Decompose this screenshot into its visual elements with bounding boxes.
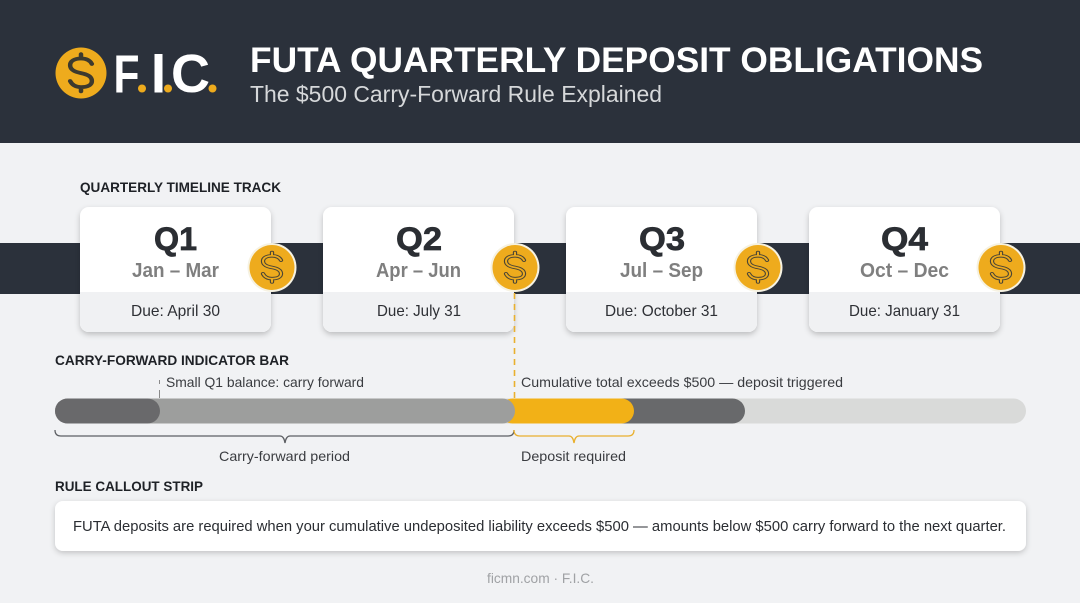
logo: F.I.C. [56, 44, 216, 104]
carry-forward indicator bar [55, 398, 1026, 424]
timeline band [0, 243, 1080, 294]
annotation: small Q1 balance: Small Q1 balance: carry forward [166, 374, 364, 390]
card: Q3: Jul – Sep [620, 260, 703, 282]
bracket: carry-forward period [55, 430, 514, 464]
icon: coin Q4 [976, 243, 1026, 292]
icon: coin Q3 [734, 243, 782, 292]
bracket: carry-forward period: Carry-forward period [219, 448, 350, 464]
icon: coin Q2 [490, 243, 540, 292]
card: Q3 [566, 207, 757, 332]
card: Q2 [323, 207, 514, 332]
card: Q1: Q1 [154, 221, 197, 257]
logo: F.I.C.: F [114, 44, 140, 104]
card: Q3: Due: October 31 [605, 303, 718, 320]
dashed deposit trigger line [514, 293, 516, 398]
card: Q1 [80, 207, 271, 332]
card: Q3: Q3 [639, 221, 685, 257]
logo: F.I.C.: C [171, 44, 210, 104]
card: Q2: Due: July 31 [377, 303, 461, 320]
card: Q4: Due: January 31 [849, 303, 960, 320]
rule callout [55, 501, 1026, 551]
subtitle: The $500 Carry-Forward Rule Explained [250, 81, 662, 107]
card: Q2: Apr – Jun [376, 260, 461, 282]
header banner [0, 0, 1080, 143]
heading: carry-forward indicator bar: CARRY-FORWARD INDICATOR BAR [55, 352, 289, 368]
card: Q1: Due: April 30 [131, 303, 220, 320]
heading: quarterly timeline track: QUARTERLY TIMELINE TRACK [80, 179, 281, 195]
bracket: deposit required [514, 430, 634, 464]
card: Q4: Oct – Dec [860, 260, 949, 282]
title: FUTA QUARTERLY DEPOSIT OBLIGATIONS [250, 41, 983, 80]
card: Q4 [809, 207, 1000, 332]
card: Q4: Q4 [881, 221, 928, 257]
heading: rule callout strip: RULE CALLOUT STRIP [55, 478, 203, 494]
card: Q1: Jan – Mar [132, 260, 219, 282]
footer: ficmn.com · F.I.C. [487, 570, 594, 586]
bracket: deposit required: Deposit required [521, 448, 626, 464]
card: Q2: Q2 [396, 221, 442, 257]
icon: coin Q1 [248, 243, 296, 292]
rule callout: FUTA deposits are required when your cumulative undeposited liability exceeds $500 — amounts below $500 carry forward to the next quarter. [73, 518, 1006, 535]
annotation: cumulative total: Cumulative total exceeds $500 — deposit triggered [521, 374, 843, 390]
